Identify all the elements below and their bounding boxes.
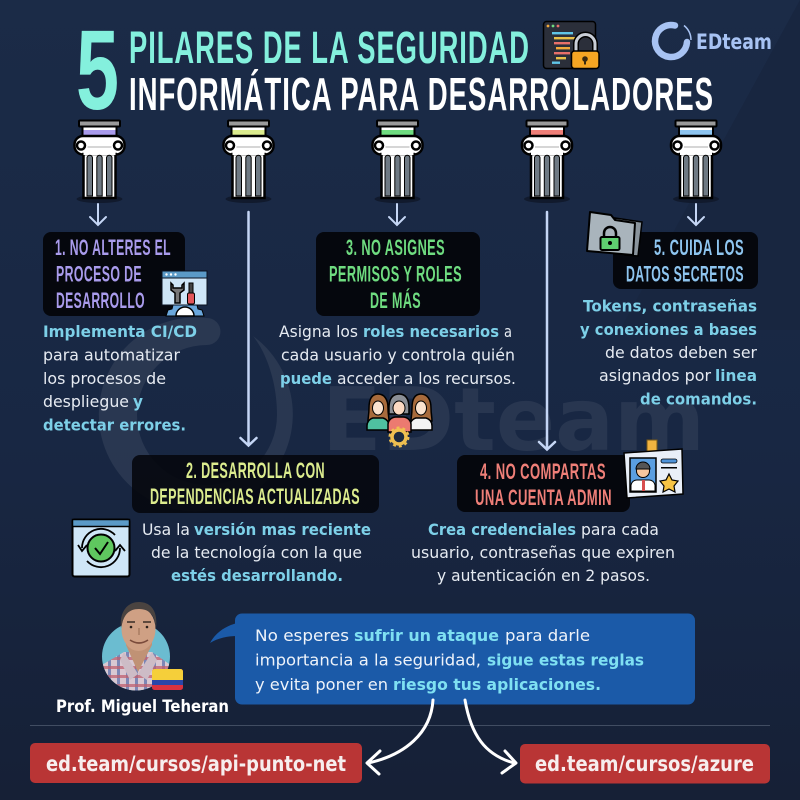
arrow: pillar 1 [90,204,106,225]
title: PILARES DE LA SEGURIDAD [129,22,530,73]
heading box 1: PROCESO DE [56,262,142,286]
text block 4: para cada [581,520,659,539]
icon: team with gear [367,394,432,446]
watermark logo: EDteam [322,369,705,471]
author name: Prof. Miguel Teheran [56,697,229,716]
panel: pillar 2 [72,455,379,585]
title [76,7,714,133]
heading box 3: PERMISOS Y ROLES [329,262,462,286]
arrow: pillar 3 [389,204,405,225]
text block 5: de datos deben ser [605,343,757,362]
text block 2: de la tecnología con la que [151,543,362,562]
watermark logo [99,317,705,511]
text block 5: asignados por [599,366,711,385]
pillar 5 [671,120,721,203]
text block 5: Tokens, contraseñas [583,296,757,316]
speech bubble: riesgo tus aplicaciones. [393,675,601,694]
heading box 1 [43,232,185,316]
speech bubble: sigue estas reglas [487,650,644,670]
heading box 3: 3. NO ASIGNES [346,235,445,260]
icon: code window with padlock [544,22,599,68]
arrow: pillar 2 [240,212,256,446]
speech bubble [210,614,695,704]
pillar 2 [224,120,274,203]
text block 1: para automatizar [43,346,180,364]
text block 4 [411,520,675,585]
panel: pillar 5 [580,212,758,408]
arrow: pillar 4 [539,212,555,450]
text block 2: estés desarrollando. [171,566,343,585]
panel: pillar 3 [279,232,516,446]
speech bubble: No esperes [255,626,349,645]
text block 3: acceder a los recursos. [337,369,516,388]
title: 5 [76,7,119,133]
speech bubble: sufrir un ataque [354,626,499,645]
heading box 2 [132,455,379,513]
arrow: to azure [465,700,516,773]
text block 3: puede [280,369,332,388]
text block 5: y conexiones a bases [580,320,757,339]
panel: pillar 1 [43,232,207,434]
link button: api-punto-net: ed.team/cursos/api-punto-net [46,752,346,777]
speech bubble: importancia a la seguridad, [255,650,481,670]
link button: azure [520,744,770,784]
heading box 1: DESARROLLO [56,288,145,313]
text block 4: y autenticación en 2 pasos. [437,566,650,585]
link button: azure: ed.team/cursos/azure [535,752,754,777]
text block 3: cada usuario y controla quién [281,346,515,364]
heading box 4 [457,455,630,512]
author portrait [100,602,172,692]
text block 2 [142,520,371,585]
pillar 1 [74,120,124,203]
text block 2: Usa la [142,520,190,539]
heading box 4: 4. NO COMPARTAS [480,459,606,484]
text block 4: usuario, contraseñas que expiren [411,543,675,562]
text block 5: linea [715,366,757,385]
icon: id card [624,440,683,498]
text block 1: despliegue [43,392,129,411]
text block 5: de comandos. [640,390,757,408]
text block 5 [580,296,757,408]
text block 1: y [133,392,144,411]
text block 1: los procesos de [43,369,166,388]
pillar 4 [522,120,572,203]
heading box 2: DEPENDENCIAS ACTUALIZADAS [150,484,360,509]
icon: Colombian flag [152,669,183,690]
speech bubble: y evita poner en [255,675,388,694]
heading box 3: DE MÁS [370,288,421,313]
icon: tools window [162,271,207,316]
heading box 4: UNA CUENTA ADMIN [475,485,612,510]
logo: EDteam: EDteam [696,30,772,54]
text block 3: Asigna los [279,322,358,341]
text block 4: Crea credenciales [428,520,576,539]
icon: update check window [72,520,130,576]
icon: locked folder [587,212,642,256]
arrow: pillar 5 [688,204,704,225]
link button: api-punto-net [30,743,362,783]
text block 1: detectar errores. [43,416,186,434]
divider [30,725,770,726]
panel: pillar 4 [411,440,683,585]
text block 1: Implementa CI/CD [43,322,197,341]
text block 1 [43,322,197,434]
text block 2: versión mas reciente [194,520,371,539]
logo: EDteam [655,25,772,57]
heading box 3 [316,232,480,316]
pillar 3 [372,120,422,203]
heading box 2: 2. DESARROLLA CON [186,458,325,483]
heading box 1: 1. NO ALTERES EL [55,235,171,260]
text block 3 [279,322,516,388]
text block 3: a [504,322,512,341]
text block 3: roles necesarios [363,322,499,341]
arrow: to api-punto-net [367,700,433,774]
heading box 5 [613,232,758,289]
speech bubble: para darle [505,626,590,645]
